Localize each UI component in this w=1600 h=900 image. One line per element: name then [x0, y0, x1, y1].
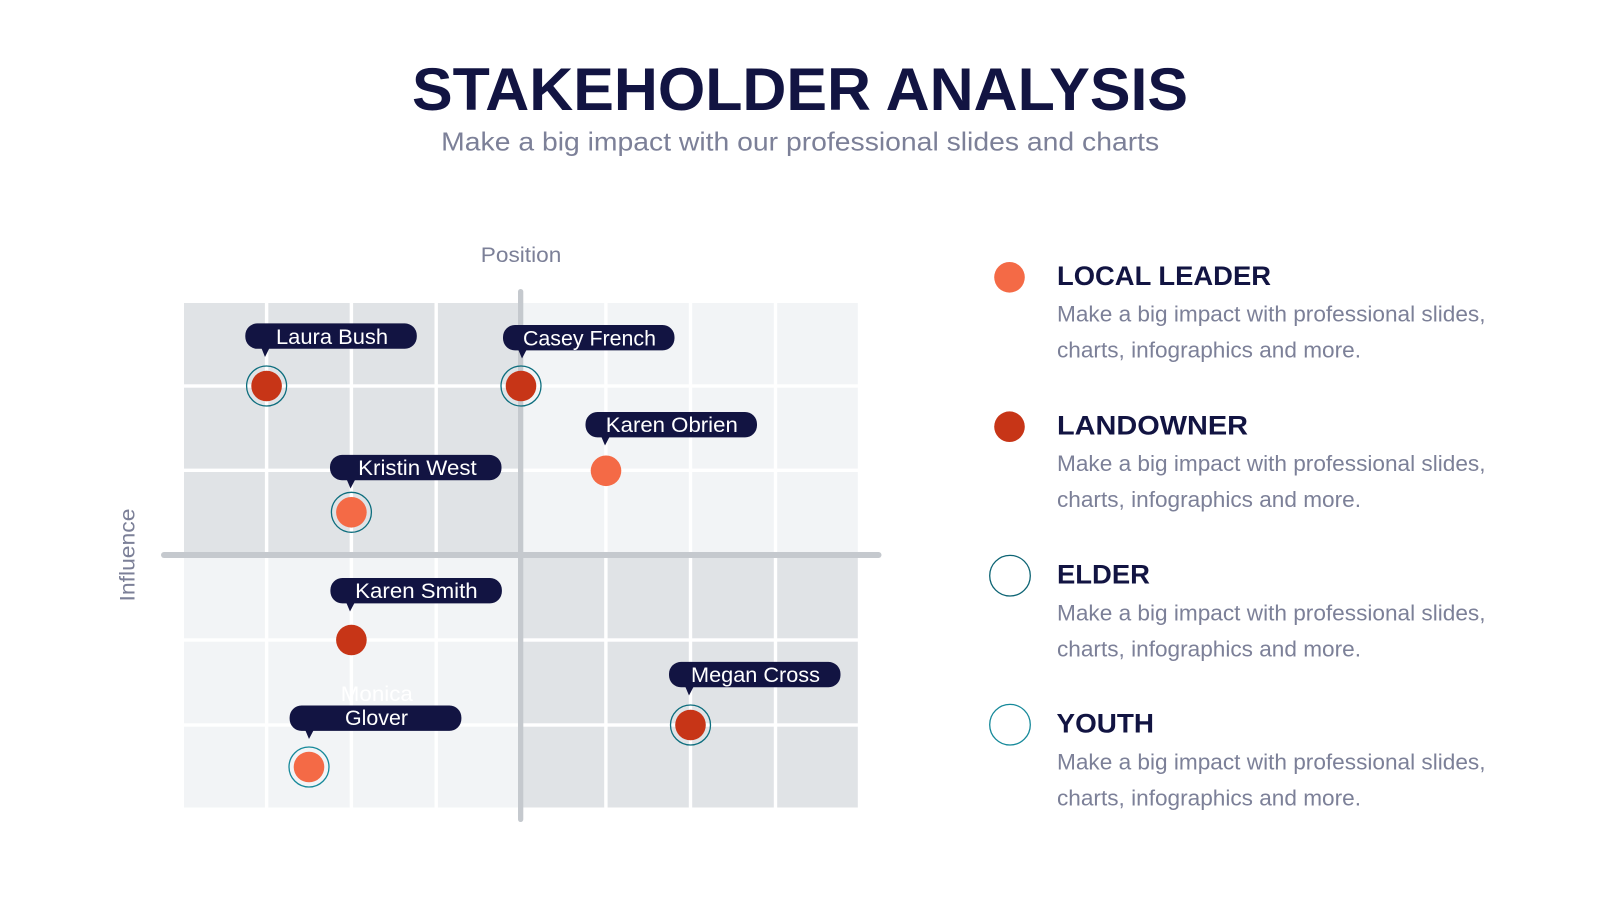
legend: local leader: Make a big impact with professional slides, — [1057, 302, 1486, 327]
marker: Karen Smith: Karen Smith — [355, 579, 478, 603]
legend: elder: charts, infographics and more. — [1057, 636, 1361, 661]
legend: landowner: Make a big impact with professional slides, — [1057, 451, 1486, 476]
axis label: position: Position — [481, 243, 561, 267]
quadrant: top left — [184, 303, 521, 555]
marker: Monica Glover — [289, 682, 461, 787]
legend: landowner: charts, infographics and more. — [1057, 487, 1361, 512]
marker: Kristin West: Kristin West — [358, 456, 477, 480]
legend: youth: charts, infographics and more. — [1057, 786, 1361, 811]
subtitle: Make a big impact with our professional slides and charts — [441, 126, 1159, 156]
vertical axis — [518, 289, 523, 822]
icon: red dot — [994, 411, 1025, 442]
marker: Karen Obrien: Karen Obrien — [606, 413, 738, 437]
legend: youth — [990, 704, 1486, 811]
legend: elder: Make a big impact with professional slides, — [1057, 600, 1486, 625]
icon: coral dot — [994, 262, 1025, 293]
legend: local leader — [994, 261, 1486, 362]
title: STAKEHOLDER ANALYSIS — [412, 56, 1188, 123]
legend: landowner: LANDOWNER — [1057, 411, 1248, 441]
marker: Monica Glover: Glover — [345, 706, 408, 730]
legend: landowner — [994, 411, 1486, 512]
marker: Laura Bush — [245, 323, 417, 406]
icon: dark teal ring — [990, 555, 1030, 596]
horizontal axis — [161, 552, 882, 558]
marker: Kristin West — [330, 455, 502, 532]
marker: Casey French: Casey French — [523, 326, 656, 350]
marker: Casey French — [501, 325, 674, 406]
marker: Laura Bush: Laura Bush — [276, 325, 388, 349]
icon: teal ring — [990, 704, 1030, 745]
quadrant: bottom right — [521, 555, 858, 808]
stakeholder matrix chart — [116, 243, 882, 822]
marker: Karen Obrien — [586, 412, 757, 486]
marker: Karen Smith — [330, 578, 502, 655]
axis label: influence: Influence — [116, 508, 140, 602]
legend: local leader: charts, infographics and more. — [1057, 338, 1361, 362]
marker: Megan Cross — [669, 662, 840, 745]
legend: youth: YOUTH — [1056, 708, 1154, 738]
marker: Monica Glover: Monica — [341, 682, 413, 706]
legend: elder: ELDER — [1057, 560, 1150, 590]
legend: youth: Make a big impact with professional slides, — [1057, 750, 1486, 775]
legend: local leader: LOCAL LEADER — [1057, 261, 1271, 291]
quadrant: top right — [521, 303, 858, 555]
legend: elder — [990, 555, 1486, 661]
quadrant: bottom left — [184, 555, 521, 808]
marker: Megan Cross: Megan Cross — [691, 663, 820, 687]
